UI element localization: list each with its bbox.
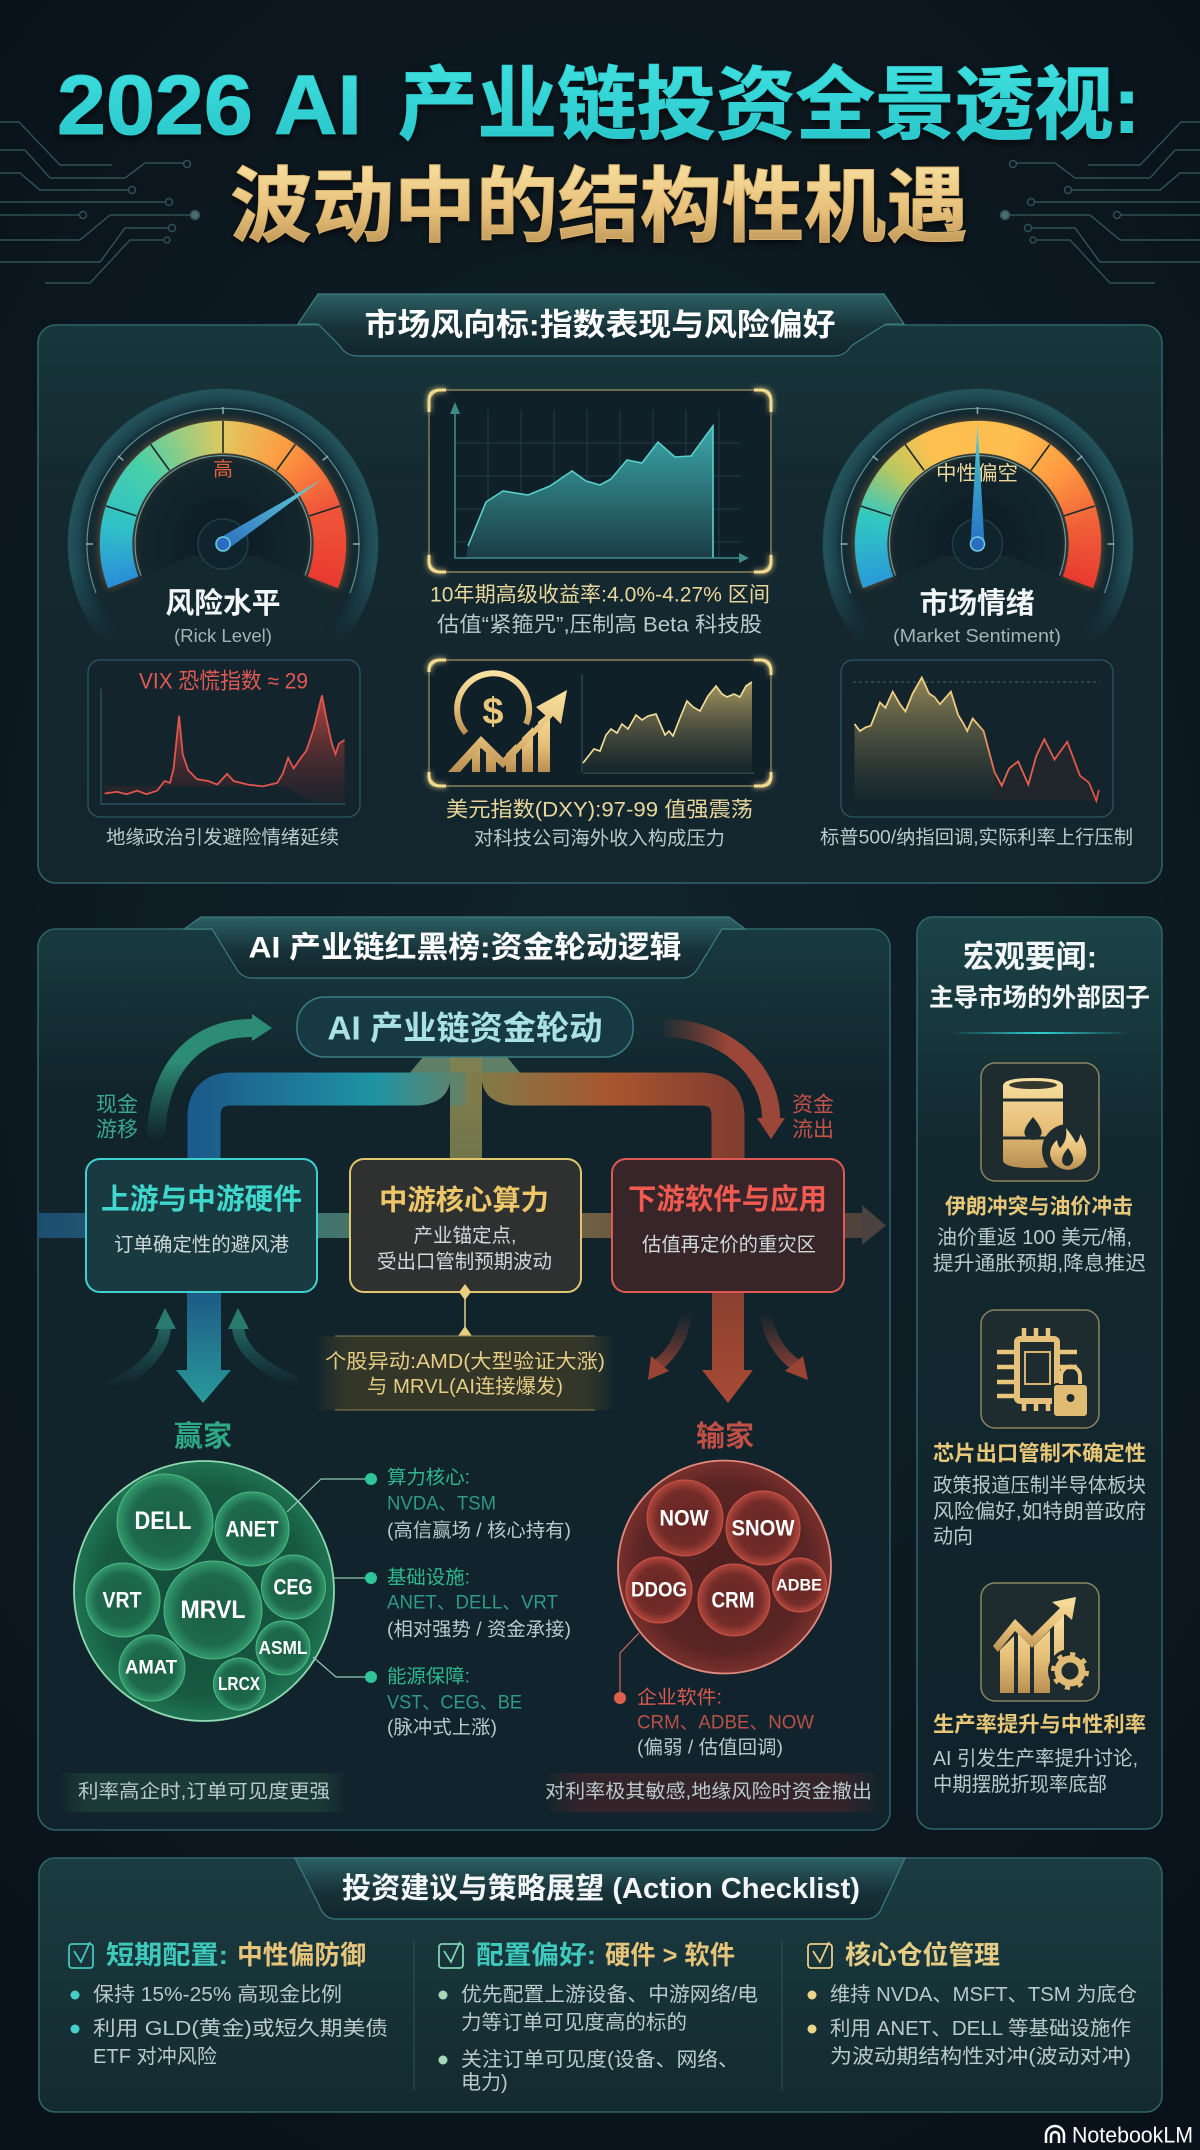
heading: winners: 赢家 [174,1420,232,1453]
icon: dollar and rising arrow [448,673,567,772]
flow band [38,1205,886,1245]
caption: dollar index: 美元指数(DXY):97-99 值强震荡 [446,798,753,822]
bubble chart: winners: DELL [134,1507,192,1535]
text: chip export controls: 动向 [933,1525,973,1548]
bubble chart: winners: VRT [102,1588,142,1612]
bubble chart: losers: ADBE [776,1576,822,1594]
text: Iran conflict: 伊朗冲突与油价冲击 [945,1194,1133,1218]
bubble chart: winners: LRCX [218,1674,260,1694]
callout: energy: (脉冲式上涨) [387,1716,497,1738]
column: core positions [808,1940,1137,2068]
text: Iran conflict [933,1194,1146,1275]
callout: enterprise software: 企业软件: [637,1686,722,1708]
callout: enterprise software [614,1633,814,1758]
callout: energy: 能源保障: [387,1666,470,1688]
callout: energy: VST、CEG、BE [387,1692,522,1714]
heading tab: capital rotation [184,917,745,978]
column: core positions: 核心仓位管理 [845,1940,1000,1970]
column: allocation preference: 硬件 > 软件 [605,1940,735,1970]
box: downstream software: 估值再定价的重灾区 [642,1234,816,1256]
icon tile: oil barrel and flame [981,1063,1099,1181]
chart: VIX: VIX 恐慌指数 ≈ 29 [139,668,308,694]
label: cash shifting: 现金 [96,1094,138,1116]
pill: capital rotation: AI 产业链资金轮动 [328,1010,602,1046]
label: cash shifting: 游移 [96,1118,138,1142]
caption: 10Y yield: 10年期高级收益率:4.0%-4.27% 区间 [430,584,770,606]
column: short-term allocation: 保持 15%-25% 高现金比例 [93,1983,342,2006]
column: short-term allocation: 利用 GLD(黄金)或短久期美债 [93,2017,388,2040]
column: allocation preference: 优先配置上游设备、中游网络/电 [461,1983,758,2006]
gauge: risk level: (Rick Level) [174,626,272,646]
heading tab: market indicators: 市场风向标:指数表现与风险偏好 [364,308,836,342]
column: short-term allocation: 短期配置: [106,1940,228,1970]
callout: compute core [287,1466,571,1542]
title: 波动中的结构性机遇 [230,162,968,252]
callout: infrastructure: (相对强势 / 资金承接) [387,1618,571,1640]
panel: macro news [917,917,1162,1829]
column: core positions: 为波动期结构性对冲(波动对冲) [830,2045,1131,2068]
text: chip export controls [933,1442,1146,1548]
heading tab: capital rotation: AI 产业链红黑榜:资金轮动逻辑 [248,932,682,964]
bubble chart: winners: MRVL [180,1596,246,1624]
box: upstream hardware [86,1159,317,1292]
callout: infrastructure [333,1566,571,1640]
column: allocation preference: 力等订单可见度高的标的 [461,2011,687,2034]
caption: 10Y yield [430,584,770,636]
bubble chart: winners: ANET [226,1516,279,1542]
column: allocation preference: 配置偏好: [476,1940,596,1970]
column: short-term allocation [69,1940,388,2068]
bubble chart: losers [618,1460,831,1674]
gauge: risk level [68,388,378,646]
column: allocation preference: 关注订单可见度(设备、网络、 [461,2048,739,2071]
caption: dollar index: 对科技公司海外收入构成压力 [474,828,725,850]
box: core compute [350,1159,581,1292]
note: winners: 利率高企时,订单可见度更强 [78,1780,330,1802]
bubble chart: winners [74,1461,334,1721]
caption: 10Y yield: 估值“紧箍咒”,压制高 Beta 科技股 [437,614,762,636]
caption: dollar index [446,798,753,850]
icon: checkbox teal [69,1942,93,1968]
box: downstream software [612,1159,844,1292]
box: downstream software: 下游软件与应用 [628,1183,827,1216]
bubble chart: losers: SNOW [732,1516,795,1540]
callout: energy [313,1657,522,1738]
label: capital outflow: 资金 [792,1094,834,1116]
logo: NotebookLM: NotebookLM [1072,2122,1193,2148]
chart: dollar index [429,660,771,786]
heading tab: action checklist: 投资建议与策略展望 (Action Checklist) [342,1872,860,1905]
gauge: risk level: 高 [213,458,233,481]
arrow: down to winners [176,1292,231,1403]
note: losers: 对利率极其敏感,地缘风险时资金撤出 [545,1780,872,1802]
arrow: cash inflow [156,1014,272,1140]
arrow: capital outflow [664,1028,785,1139]
box: core compute: 产业锚定点, [414,1225,516,1247]
bubble chart: winners: AMAT [125,1658,177,1678]
callout: enterprise software: (偏弱 / 估值回调) [637,1736,783,1758]
title: 2026 AI [57,58,362,152]
text: chip export controls: 风险偏好,如特朗普政府 [933,1500,1146,1523]
panel: AI chain winners and losers [38,917,890,1830]
chart: 10Y yield [429,390,771,572]
heading: macro news: 主导市场的外部因子 [929,984,1150,1012]
label: capital outflow: 流出 [792,1118,834,1142]
icon: checkbox gold [808,1942,832,1968]
panel: action checklist [39,1858,1162,2112]
bubble chart: losers: DDOG [631,1578,687,1602]
title: 产业链投资全景透视: [398,60,1140,150]
gauge: market sentiment: (Market Sentiment) [893,626,1061,646]
text: Iran conflict: 油价重返 100 美元/桶, [937,1226,1132,1249]
circuit decoration left [0,122,200,283]
chart: S&P and Nasdaq [841,660,1113,817]
panel: market indicators [38,294,1162,883]
text: chip export controls: 政策报道压制半导体板块 [933,1474,1146,1497]
callout: AMD and MRVL: 与 MRVL(AI连接爆发) [367,1375,563,1398]
box: upstream hardware: 上游与中游硬件 [101,1183,302,1216]
column: short-term allocation: ETF 对冲风险 [93,2045,217,2068]
bubble chart: winners: CEG [274,1574,312,1600]
arrows: small teal inflow [108,1308,297,1387]
heading tab: action checklist [295,1858,905,1919]
callout: infrastructure: ANET、DELL、VRT [387,1592,558,1614]
arrow: down to losers [702,1292,753,1403]
heading: losers: 输家 [696,1420,754,1453]
text: productivity: 生产率提升与中性利率 [933,1714,1146,1736]
column: allocation preference: 电力) [461,2071,508,2094]
title [57,58,1140,252]
column: allocation preference [438,1940,758,2094]
icon tile: chip and lock [981,1310,1099,1428]
box: core compute: 中游核心算力 [379,1184,549,1216]
callout: compute core: 算力核心: [387,1466,470,1488]
callout: infrastructure: 基础设施: [387,1566,470,1588]
circuit decoration right [1000,122,1200,283]
bubble chart: losers: NOW [660,1506,709,1530]
heading tab: market indicators [298,294,904,356]
text: productivity: 中期摆脱折现率底部 [933,1773,1107,1796]
column: core positions: 维持 NVDA、MSFT、TSM 为底仓 [830,1983,1137,2006]
text: chip export controls: 芯片出口管制不确定性 [933,1442,1146,1466]
column: core positions: 利用 ANET、DELL 等基础设施作 [830,2017,1131,2040]
bubble chart: losers: CRM [712,1588,754,1612]
pill: capital rotation [297,997,633,1057]
label: capital outflow [792,1094,834,1142]
callout: AMD and MRVL [316,1284,614,1410]
note: winners [60,1773,345,1812]
bubble chart: winners: ASML [258,1638,308,1658]
gauge: market sentiment: 中性偏空 [936,462,1018,485]
caption: VIX: 地缘政治引发避险情绪延续 [106,826,339,848]
column: short-term allocation: 中性偏防御 [237,1940,366,1970]
icon: dollar and rising arrow: $ [482,691,504,733]
heading: macro news: 宏观要闻: [963,940,1097,974]
callout: AMD and MRVL: 个股异动:AMD(大型验证大涨) [325,1350,605,1373]
gauge: market sentiment: 市场情绪 [920,587,1034,620]
text: Iran conflict: 提升通胀预期,降息推迟 [933,1252,1146,1275]
gauge: market sentiment [822,388,1134,646]
heading: macro news [929,940,1150,1012]
callout: compute core: (高信赢场 / 核心持有) [387,1520,571,1542]
text: productivity [933,1714,1146,1796]
caption: S&P and Nasdaq: 标普500/纳指回调,实际利率上行压制 [820,826,1133,848]
note: losers [545,1773,880,1812]
callout: compute core: NVDA、TSM [387,1494,496,1514]
callout: enterprise software: CRM、ADBE、NOW [637,1712,814,1734]
chart: VIX [88,660,360,817]
flow pipes [204,1057,728,1160]
icon tile: productivity chart and gear [981,1583,1099,1701]
label: cash shifting [96,1094,138,1142]
icon: checkbox green [439,1942,463,1968]
gauge: risk level: 风险水平 [166,587,280,620]
box: upstream hardware: 订单确定性的避风港 [114,1234,289,1256]
arrows: small red outflow [648,1312,808,1380]
text: productivity: AI 引发生产率提升讨论, [933,1747,1138,1770]
box: core compute: 受出口管制预期波动 [377,1251,552,1273]
